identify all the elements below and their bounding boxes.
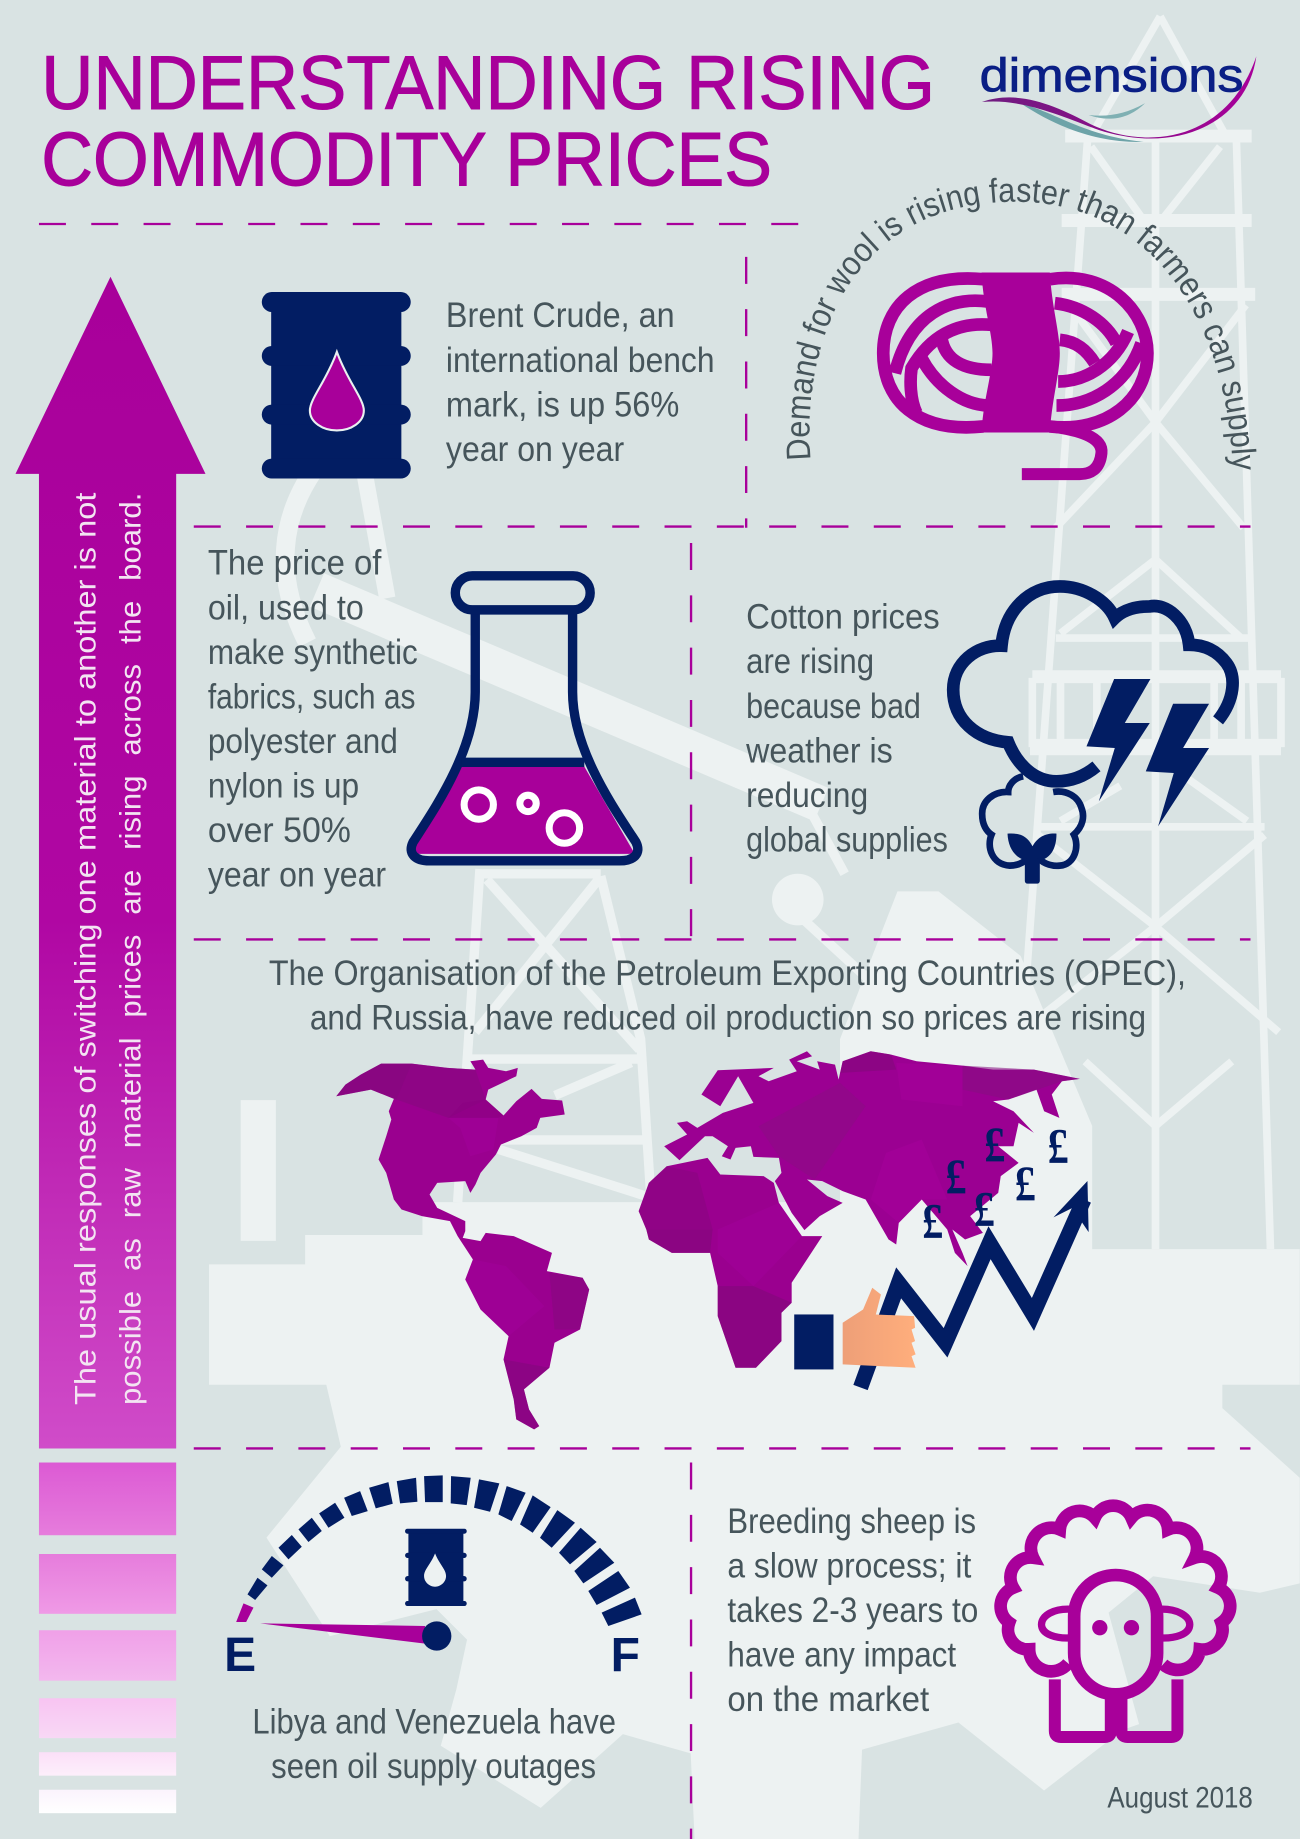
pound symbols: £ [946, 1149, 967, 1204]
dividers [39, 223, 800, 225]
text: price of oil: The price of [208, 544, 382, 583]
text: OPEC: and Russia, have reduced oil production so prices are rising [310, 999, 1146, 1038]
rising arrow [15, 277, 205, 1448]
title [41, 41, 935, 202]
text: Brent Crude: year on year [446, 430, 624, 469]
icon: fuel gauge [224, 1475, 642, 1682]
icon: laboratory flask [411, 576, 638, 861]
text: Brent Crude: Brent Crude, an [446, 296, 675, 335]
text: breeding sheep: takes 2-3 years to [727, 1591, 978, 1630]
text: price of oil: year on year [208, 856, 386, 895]
text: cotton prices: are rising [746, 642, 874, 681]
small barrel [405, 1529, 467, 1606]
pound symbols: £ [974, 1182, 995, 1237]
text: price of oil: polyester and [208, 722, 398, 761]
pound symbols: £ [984, 1117, 1005, 1172]
text: price of oil: nylon is up [208, 767, 359, 806]
pound symbols: £ [1048, 1118, 1069, 1173]
logo: dimensions: dimensions [980, 49, 1243, 101]
text: price of oil: fabrics, such as [208, 677, 415, 716]
text: price of oil: make synthetic [208, 633, 418, 672]
text: Libya and Venezuela: seen oil supply outages [271, 1747, 596, 1786]
arrow caption: The usual responses of switching one material to another is not [69, 493, 102, 1405]
eurasia [664, 1051, 1080, 1266]
icon: oil barrel [262, 292, 411, 479]
gauge ticks [236, 1475, 642, 1626]
text: Brent Crude: international bench [446, 341, 715, 380]
date: August 2018 [1107, 1781, 1253, 1814]
text: breeding sheep [727, 1502, 978, 1719]
text: breeding sheep: on the market [727, 1680, 929, 1719]
text: price of oil: oil, used to [208, 588, 364, 627]
curved text: demand for wool: Demand for wool is rising faster than farmers can supply [786, 178, 1256, 470]
text: OPEC [269, 954, 1186, 1038]
text: price of oil [208, 544, 418, 895]
icon: thumbs up hand [794, 1288, 916, 1369]
title: UNDERSTANDING RISING [41, 41, 935, 126]
needle [260, 1623, 425, 1644]
text: cotton prices: reducing [746, 776, 868, 815]
africa [639, 1158, 822, 1368]
text: OPEC: The Organisation of the Petroleum Exporting Countries (OPEC), [269, 954, 1186, 993]
text: Brent Crude: mark, is up 56% [446, 385, 679, 424]
text: Brent Crude [446, 296, 715, 469]
full label: F [611, 1629, 640, 1682]
text: Libya and Venezuela [252, 1702, 616, 1786]
text: breeding sheep: Breeding sheep is [727, 1502, 976, 1541]
text: cotton prices: Cotton prices [746, 598, 940, 637]
fading bars under arrow [39, 1463, 176, 1813]
logo: dimensions [980, 49, 1256, 142]
title: COMMODITY PRICES [41, 117, 772, 202]
text: Libya and Venezuela: Libya and Venezuela have [252, 1702, 616, 1741]
icon: ball of wool [883, 273, 1147, 474]
pound symbols: £ [1015, 1156, 1036, 1211]
pound symbols [922, 1117, 1069, 1248]
text: breeding sheep: have any impact [727, 1636, 956, 1675]
text: breeding sheep: a slow process; it [727, 1546, 972, 1585]
text: cotton prices: weather is [745, 731, 893, 770]
icon: sheep [1001, 1506, 1230, 1737]
pound symbols: £ [922, 1193, 943, 1248]
arrow caption [69, 493, 147, 1405]
text: cotton prices [745, 598, 948, 859]
icon: cotton plant [982, 776, 1083, 884]
text: cotton prices: global supplies [746, 820, 948, 859]
empty label: E [224, 1629, 256, 1682]
text: cotton prices: because bad [746, 687, 921, 726]
icon: storm cloud with lightning [953, 586, 1233, 826]
text: price of oil: over 50% [208, 811, 351, 850]
americas [336, 1060, 589, 1429]
rising price arrow [861, 1181, 1089, 1387]
arrow caption: possible as raw material prices are rising across the board. [114, 493, 147, 1405]
world map [336, 1051, 1080, 1429]
